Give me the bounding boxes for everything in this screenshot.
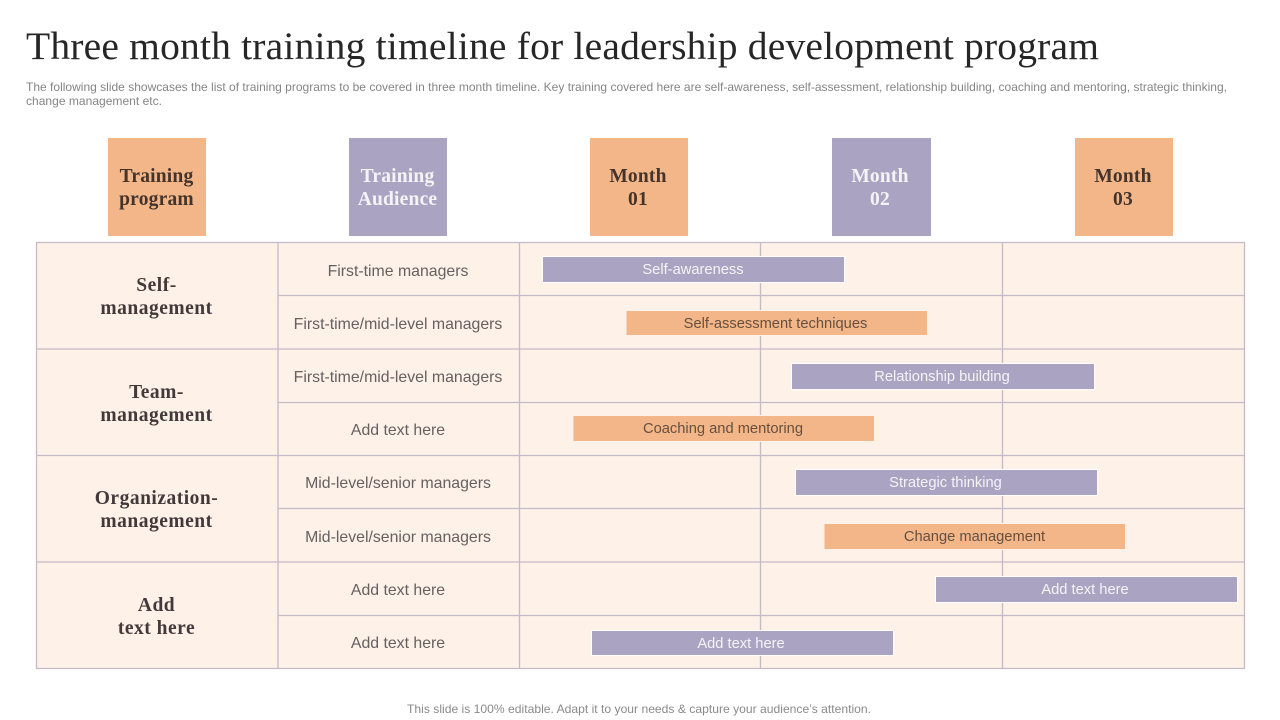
audience labels: Add text here [351, 422, 445, 439]
category: self-management: Self- [136, 275, 177, 296]
header: month 02 [832, 138, 931, 236]
header: month 03: Month [1094, 166, 1152, 187]
bar: self-assessment techniques [626, 310, 928, 336]
header: month 02: Month [851, 166, 909, 187]
column headers [108, 138, 1173, 236]
bar: relationship building: Relationship building [874, 369, 1010, 385]
category: self-management: management [100, 298, 213, 319]
footer note: This slide is 100% editable. Adapt it to your needs & capture your audience’s attention. [407, 702, 871, 716]
header: training audience [349, 138, 447, 236]
category: organization-management: Organization- [95, 488, 218, 509]
header: month 02: 02 [870, 189, 890, 210]
audience labels: First-time/mid-level managers [294, 316, 502, 333]
bar: add text here (month 01): Add text here [697, 636, 785, 652]
category: add text here: Add [138, 595, 175, 616]
bar: self-awareness [542, 256, 844, 282]
header: training audience: Audience [358, 189, 437, 210]
bar: add text here (month 03) [936, 576, 1238, 602]
audience labels: Mid-level/senior managers [305, 529, 491, 546]
audience labels: Add text here [351, 635, 445, 652]
bar: add text here (month 01) [592, 630, 894, 656]
bar: coaching and mentoring: Coaching and mentoring [643, 421, 803, 437]
category: add text here: text here [118, 618, 195, 639]
category: organization-management: management [100, 511, 213, 532]
category: team-management: Team- [129, 382, 184, 403]
bar: self-assessment techniques: Self-assessment techniques [684, 316, 867, 332]
audience labels [294, 263, 502, 652]
header: month 01: Month [609, 166, 667, 187]
header: month 01 [590, 138, 688, 236]
audience labels: First-time managers [328, 263, 469, 280]
bar: strategic thinking: Strategic thinking [889, 475, 1002, 491]
bar: add text here (month 03): Add text here [1041, 582, 1129, 598]
bar: strategic thinking [796, 470, 1098, 496]
bar: coaching and mentoring [573, 416, 874, 442]
header: training program [108, 138, 206, 236]
header: month 03 [1075, 138, 1173, 236]
bar: change management: Change management [904, 529, 1045, 545]
description text: The following slide showcases the list of training programs to be covered in three month timeline. Key training covered here are self-awareness, self-assessment, relationship building, coaching and mentoring, strategic thinking, [26, 81, 1227, 94]
title: Three month training timeline for leadership development program [26, 24, 1099, 68]
audience labels: Mid-level/senior managers [305, 475, 491, 492]
description text: change management etc. [26, 95, 162, 108]
header: month 01: 01 [628, 189, 648, 210]
header: month 03: 03 [1113, 189, 1133, 210]
bar: self-awareness: Self-awareness [642, 262, 744, 278]
description text [26, 81, 1227, 108]
header: training program: program [119, 189, 194, 210]
timeline table [36, 242, 1244, 668]
header: training program: Training [120, 166, 193, 187]
audience labels: First-time/mid-level managers [294, 369, 502, 386]
bar: relationship building [792, 364, 1094, 390]
audience labels: Add text here [351, 582, 445, 599]
gantt bars [542, 256, 1238, 656]
header: training audience: Training [361, 166, 434, 187]
bar: change management [824, 524, 1126, 550]
category labels [95, 275, 218, 639]
category: team-management: management [100, 405, 213, 426]
